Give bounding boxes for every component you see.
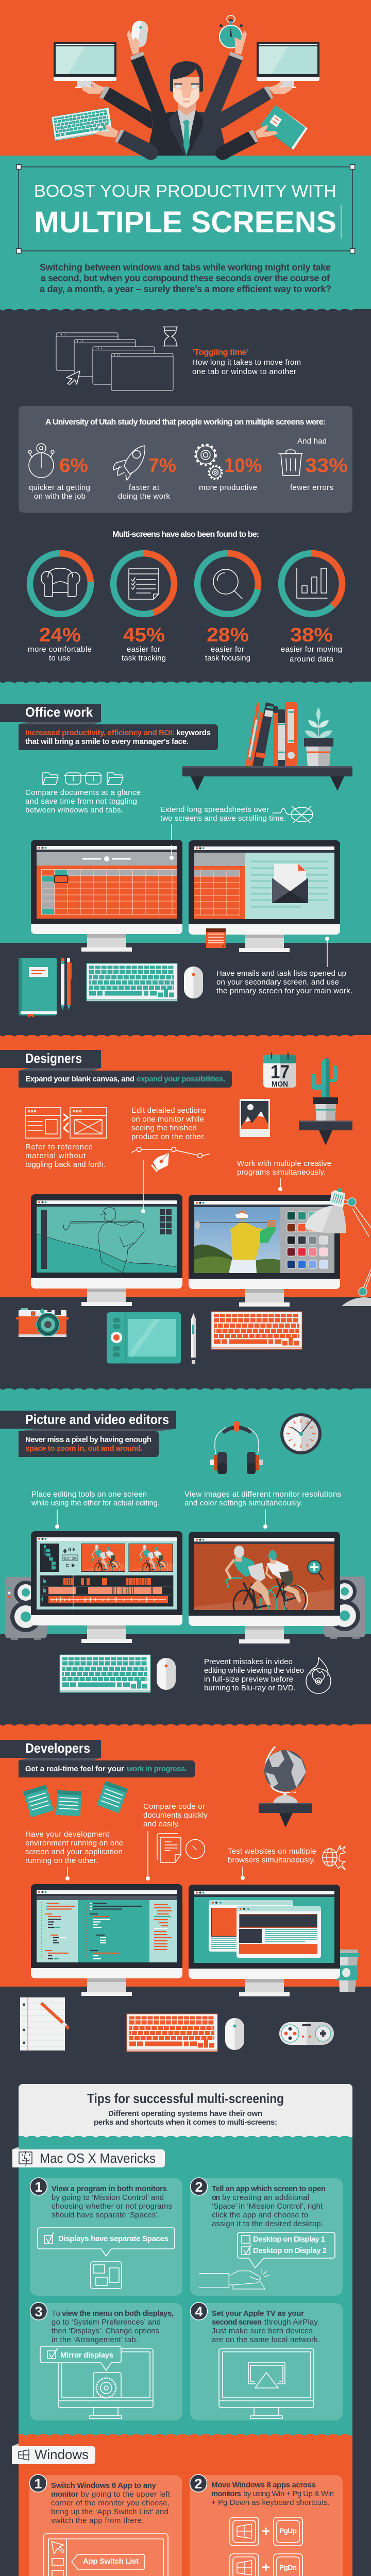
section background: designers desk: [0, 1297, 371, 1388]
text: creative programs: Work with multiple creative: [237, 1159, 331, 1168]
ring chart: 45% task tracking: [113, 553, 174, 663]
text: place editing tools: Place editing tools on one screen: [31, 1490, 147, 1499]
leader line: edit sections: [141, 1160, 145, 1213]
intro paragraph: a day, a month, a year – surely there’s a more efficient way to work?: [40, 284, 331, 294]
leader line: creative programs: [278, 1178, 282, 1191]
panel heading: developers: work in progress.: [126, 1765, 187, 1773]
card: windows tip 1: 1: [34, 2476, 42, 2492]
card: windows tip 2: + Pg Down as keyboard shortcuts.: [211, 2498, 330, 2507]
text: edit detailed sections: product on the other.: [131, 1132, 206, 1141]
graphics tablet: [107, 1312, 181, 1364]
sticky note: [206, 928, 226, 948]
card: mac tip 1: by going to ‘Mission Control’ and: [52, 2193, 164, 2202]
card: windows tip 1: Switch Windows 8 App to any: [51, 2481, 157, 2490]
video thumbnail 1: [81, 1544, 125, 1572]
monitor: source code: [31, 1884, 182, 1996]
monitor right: [257, 42, 319, 88]
section background: tips and quote dark: [0, 1987, 371, 2576]
speaker left: [5, 1577, 47, 1640]
globe on shelf: [259, 1747, 312, 1827]
card: mac tip 4: through AirPlay.: [264, 2318, 319, 2327]
panel heading: designers: Designers: [25, 1050, 82, 1066]
panel heading: picture and video editors: space to zoom in, out and around.: [25, 1444, 143, 1453]
leader line: view images: [263, 1510, 267, 1529]
icon: envelope: [272, 864, 308, 903]
stylus: [191, 1313, 196, 1364]
text: view images: View images at different monitor resolutions: [184, 1490, 341, 1499]
wall clock: [280, 1413, 322, 1454]
ring chart: 28% task focusing: 28%: [207, 624, 249, 646]
card: mac tip 2: Tell an app which screen to open: [212, 2184, 326, 2193]
ring chart: 24% comfortable: more comfortable: [28, 645, 92, 654]
card: mac tip 2: by creating an additional: [222, 2193, 309, 2202]
text: edit detailed sections: Edit detailed sections: [131, 1106, 206, 1115]
card: mac tip 4: Just make sure both devices: [212, 2327, 313, 2335]
panel heading: office work: Increased productivity, efficiency and ROI:: [25, 728, 175, 737]
text: refer to reference: toggling back and forth.: [25, 1160, 106, 1169]
multi-screens heading: Multi-screens have also been found to be:: [112, 530, 259, 539]
keys: win + PgUp: PgUp: [279, 2527, 297, 2535]
study heading: A University of Utah study found that people working on multiple screens were:: [45, 418, 326, 427]
notepad and pencil: [20, 1997, 69, 2050]
card: mac tip 4: 4: [195, 2304, 203, 2319]
card: windows tip 1: App Switch List: [83, 2557, 139, 2566]
keyboard: [60, 1655, 150, 1692]
browser window front: [237, 1906, 321, 1958]
icon: reference windows: [25, 1108, 107, 1138]
toggling time text: one tab or window to another: [192, 367, 296, 376]
title: [34, 181, 341, 239]
text: prevent mistakes: Prevent mistakes in video: [204, 1657, 293, 1666]
text: extend spreadsheets: two screens and save scrolling time.: [160, 814, 286, 823]
stat: 6% quicker: 6%: [59, 455, 88, 477]
text: compare code: documents quickly: [143, 1811, 208, 1820]
keys: win + PgDn: PgDn: [279, 2563, 297, 2571]
card: mac tip 2: on: [212, 2193, 220, 2202]
panel heading: developers: Get a real-time feel for your: [25, 1765, 124, 1773]
ring chart: 24% comfortable: to use: [49, 654, 71, 663]
stat: 7% faster: faster at: [129, 483, 160, 492]
text: place editing tools: while using the other for actual editing.: [31, 1499, 160, 1507]
ring chart: 45% task tracking: task tracking: [122, 654, 166, 663]
leader line: compare code: [146, 1831, 150, 1880]
tips heading: Tips for successful multi-screening: [87, 2091, 284, 2106]
text: compare code: [143, 1802, 208, 1828]
playback controls: [62, 1548, 78, 1567]
card: windows tip 1: monitor: [51, 2490, 78, 2499]
icon: globe with bursts: [323, 1845, 346, 1870]
calendar: 17: [271, 1061, 290, 1082]
mouse: [157, 1658, 176, 1690]
stat: 6% quicker: quicker at getting: [29, 483, 90, 492]
arm lower left: [96, 125, 159, 160]
panel heading: picture and video editors: [0, 1411, 176, 1457]
title: MULTIPLE SCREENS: [34, 206, 336, 239]
text: compare documents: [25, 788, 141, 815]
headphones: [210, 1421, 263, 1474]
text: prevent mistakes: burning to Blu-ray or DVD.: [204, 1684, 296, 1692]
sticky notes: [23, 1781, 128, 1817]
tab: Windows: [12, 2444, 95, 2464]
text: test websites: browsers simultaneously.: [228, 1856, 315, 1865]
arm middle left: [81, 81, 153, 129]
card: mac tip 4: are on the same local network.: [212, 2335, 320, 2344]
text: compare code: Compare code or: [143, 1802, 205, 1811]
ring chart: 24% comfortable: 24%: [39, 624, 81, 646]
leader line: development: [65, 1867, 70, 1880]
ring chart: 28% task focusing: [197, 553, 258, 663]
card: mac tip 2: 2: [195, 2179, 203, 2195]
books: [245, 702, 297, 766]
cactus and shelf: [299, 1058, 352, 1145]
panel: tips for successful multi-screening: [0, 2084, 371, 2576]
panel heading: picture and video editors: Picture and video editors: [25, 1412, 169, 1427]
card: mac tip 2: ‘Space’ in ‘Mission Control’, right: [212, 2202, 323, 2211]
icon: burning disc: [306, 1657, 331, 1693]
text: place editing tools: [31, 1490, 160, 1507]
text: creative programs: [237, 1159, 331, 1177]
text: view images: and color settings simultaneously.: [184, 1499, 302, 1507]
text: emails and task lists: the primary screen for your main work.: [216, 987, 352, 995]
stat: 7% faster: [113, 446, 176, 501]
text: development environment: [25, 1830, 123, 1865]
panel heading: picture and video editors: Never miss a pixel by having enough: [25, 1435, 151, 1444]
ring chart: 28% task focusing: easier for: [211, 645, 244, 654]
section background: developers orange: [0, 1724, 371, 1987]
plant: [304, 707, 333, 766]
section background: designers orange: [0, 1035, 371, 1297]
section background: editors desk: [0, 1634, 371, 1724]
card: windows tip 2: Move Windows 8 apps across: [211, 2481, 316, 2489]
notebook: [19, 958, 57, 1018]
panel heading: office work: that will bring a smile to every manager's face.: [25, 737, 189, 746]
card: mac tip 1: should have separate ‘Spaces’.: [52, 2211, 160, 2219]
stat: 7% faster: 7%: [148, 455, 176, 477]
ring chart: 38% moving data: easier for moving: [281, 645, 342, 654]
calendar: [263, 1053, 296, 1089]
ring chart: 38% moving data: [281, 553, 342, 664]
ring chart: 24% comfortable: [28, 553, 92, 663]
text: refer to reference: [25, 1143, 106, 1169]
panel heading: office work: Office work: [25, 704, 93, 720]
text: development environment: Have your development: [25, 1830, 110, 1839]
leader line: editing tools: [55, 1510, 59, 1529]
section background: dark statistics: [0, 309, 371, 682]
text: edit detailed sections: seeing the finished: [131, 1124, 197, 1132]
icon: overlapping browser windows: [56, 333, 173, 391]
keyboard held: [52, 108, 112, 141]
icon: bezier pen tool: [131, 1147, 209, 1172]
leader line: spreadsheets: [171, 824, 172, 855]
stat: 33% fewer errors: And had: [297, 437, 327, 446]
card: mac tip 4: [190, 2302, 343, 2420]
arm middle right: [219, 81, 292, 129]
mouse: [225, 2018, 244, 2050]
card: windows tip 1: by going to the upper left: [81, 2490, 171, 2499]
card: mac tip 1: 1: [35, 2179, 43, 2195]
monitor left: [54, 42, 116, 88]
monitor: email and spreadsheet: [189, 840, 340, 952]
tips heading: Different operating systems have their own: [108, 2109, 262, 2118]
torso: [146, 110, 227, 156]
card: windows tip 1: corner of the monitor you choose,: [51, 2499, 170, 2507]
section background: title teal: [0, 156, 371, 309]
stat: 6% quicker: on with the job: [34, 492, 86, 501]
text: refer to reference: Refer to reference: [25, 1143, 93, 1151]
ring chart: 45% task tracking: 45%: [123, 624, 165, 646]
card: mac tip 3: [30, 2302, 182, 2420]
arm upper right with stopwatch: [198, 15, 247, 156]
gamepad: [279, 2022, 334, 2045]
monitor: line art golfer: [31, 1160, 182, 1306]
panel heading: developers: Developers: [25, 1740, 90, 1756]
stat: 33% fewer errors: 33%: [305, 455, 348, 477]
tab: Mac OS X Mavericks: Mac OS X Mavericks: [40, 2150, 156, 2166]
video timeline: [40, 1574, 173, 1609]
panel: University of Utah study: [19, 406, 352, 513]
notebook held: [260, 105, 308, 150]
text: creative programs: programs simultaneously.: [237, 1168, 326, 1177]
monitor: spreadsheet: [31, 840, 182, 952]
monitor: browser windows: [189, 1885, 340, 1996]
card: mac tip 3: To: [52, 2309, 60, 2318]
polaroid photo: [240, 1099, 270, 1137]
card: mac tip 3: 3: [35, 2304, 43, 2319]
ring chart: 38% moving data: 38%: [290, 624, 333, 646]
card: mac tip 1: choosing whether or not programs: [52, 2202, 172, 2211]
panel heading: office work: keywords: [176, 728, 211, 737]
tips heading: perks and shortcuts when it comes to multi-screens:: [94, 2118, 277, 2127]
tips heading: [87, 2091, 284, 2127]
section background: hero orange: [0, 0, 371, 156]
arm lower right: [215, 125, 278, 160]
browser window back: [209, 1900, 293, 1952]
ring chart: 28% task focusing: task focusing: [205, 654, 250, 663]
card: windows tip 2: monitors: [211, 2489, 241, 2498]
card: mac tip 2: click the app and choose to: [212, 2211, 308, 2219]
card: mac tip 3: go to ‘System Preferences’ and: [52, 2318, 161, 2327]
card: windows tip 2: by using Win + Pg Up & Win: [243, 2489, 334, 2498]
card: windows tip 1: switch the app from there.: [51, 2516, 144, 2525]
intro paragraph: [40, 262, 331, 294]
tab: Mac OS X Mavericks: [12, 2147, 165, 2167]
panel heading: designers: expand your possibilities.: [137, 1075, 225, 1083]
ring chart: 45% task tracking: easier for: [127, 645, 160, 654]
card: mac tip 4: Set your Apple TV as your: [212, 2309, 304, 2318]
card: windows tip 2: 2: [194, 2476, 203, 2492]
card: mac tip 1: Displays have separate Spaces: [58, 2234, 168, 2243]
monitor: video editing suite: [31, 1531, 182, 1643]
icon: documents and timer: [157, 1834, 205, 1862]
arm upper left with mouse: [127, 20, 175, 156]
playback controls: 03:20: [63, 1556, 77, 1562]
stat: 33% fewer errors: fewer errors: [290, 483, 333, 492]
text: test websites: Test websites on multiple: [228, 1847, 316, 1856]
text: edit detailed sections: [131, 1106, 206, 1141]
desk lamp: [305, 1188, 371, 1306]
toggling time text: How long it takes to move from: [192, 358, 301, 367]
calendar: MON: [272, 1080, 288, 1089]
intro paragraph: Switching between windows and tabs while working might only take: [40, 262, 331, 273]
stat: 7% faster: doing the work: [118, 492, 170, 501]
card: mac tip 1: [30, 2178, 182, 2296]
title frame: [16, 165, 355, 253]
tab: Windows: Windows: [35, 2447, 89, 2462]
panel heading: designers: Expand your blank canvas, and: [25, 1075, 134, 1083]
monitor: full size video preview: [189, 1532, 340, 1643]
text: compare documents: Compare documents at a glance: [25, 788, 141, 797]
card: windows tip 2: [190, 2475, 343, 2576]
keys: win + PgUp: [230, 2517, 302, 2546]
card: windows tip 1: [29, 2475, 182, 2576]
text: view images: [184, 1490, 341, 1507]
panel heading: office work: [0, 704, 218, 750]
text: prevent mistakes: in full-size preview before: [204, 1675, 293, 1684]
card: windows tip 1: bring up the ‘App Switch List’ and: [51, 2507, 168, 2516]
text: compare documents: and save time from not toggling: [25, 797, 137, 806]
text: extend spreadsheets: Extend long spreadsheets over: [160, 805, 269, 814]
card: mac tip 2: assign it to the desired desktop.: [212, 2219, 323, 2228]
card: mac tip 3: in the ‘Arrangement’ tab.: [52, 2335, 138, 2344]
text: edit detailed sections: on one monitor while: [131, 1115, 204, 1124]
text: development environment: running on the other.: [25, 1856, 98, 1865]
camera: [16, 1308, 69, 1337]
keyboard: [87, 963, 177, 1001]
text: compare code: and easily.: [143, 1820, 180, 1828]
card: mac tip 3: then ‘Displays’. Change options: [52, 2327, 159, 2335]
text: emails and task lists: [216, 969, 352, 995]
pencils: [61, 958, 72, 1010]
file tree: [40, 1544, 59, 1572]
title: BOOST YOUR PRODUCTIVITY WITH: [34, 181, 336, 200]
keys: win + PgDn: [230, 2554, 302, 2576]
panel heading: designers: [0, 1050, 232, 1088]
head: [170, 61, 203, 115]
card: mac tip 3: Mirror displays: [60, 2351, 113, 2360]
text: development environment: environment running on one: [25, 1839, 123, 1848]
stat: 10% productive: 10%: [224, 455, 262, 477]
stat: 10% productive: [195, 445, 262, 492]
text: compare documents: between windows and tabs.: [25, 806, 123, 815]
section background: editors teal: [0, 1388, 371, 1634]
keyboard orange: [211, 1312, 302, 1349]
keyboard orange: [127, 2014, 217, 2052]
card: mac tip 3: view the menu on both displays,: [62, 2309, 174, 2318]
intro paragraph: a second, but when you compound these seconds over the course of: [41, 273, 330, 283]
card: mac tip 2: Desktop on Display 2: [253, 2246, 327, 2255]
mouse: [184, 967, 203, 998]
icon: hourglass: [163, 327, 178, 346]
toggling time text: ‘Toggling time’: [192, 347, 249, 357]
speaker right: [324, 1577, 365, 1639]
card: mac tip 2: Desktop on Display 1: [253, 2235, 325, 2244]
text: emails and task lists: on your secondary screen, and use: [216, 978, 339, 987]
shelf: [182, 766, 352, 791]
text: prevent mistakes: editing while viewing the video: [204, 1666, 304, 1675]
ring chart: 38% moving data: around data: [290, 655, 334, 664]
text: emails and task lists: Have emails and task lists opened up: [216, 969, 346, 978]
video thumbnail 2: [129, 1544, 173, 1572]
coffee cup: [336, 1950, 360, 1992]
section background: office teal: [0, 682, 371, 943]
text: development environment: screen and your application: [25, 1848, 123, 1856]
toggling time text: [192, 347, 301, 376]
icon: zoom magnifier: [308, 1561, 324, 1580]
text: refer to reference: material without: [25, 1151, 86, 1160]
shelf with books and plant: [182, 702, 352, 791]
card: mac tip 2: [190, 2178, 343, 2296]
text: extend spreadsheets: [160, 805, 286, 823]
panel heading: developers: [0, 1740, 195, 1777]
stat: 10% productive: more productive: [199, 483, 257, 492]
section background: office desk: [0, 943, 371, 1035]
text: test websites: [228, 1847, 316, 1865]
monitor: colour photo golfer and swatches: [189, 1195, 340, 1307]
hero illustration: multitasking businessman: [52, 15, 319, 160]
icons: folders and glasses: [43, 773, 123, 785]
icon: crossed out scroll mouse: [273, 806, 313, 823]
leader line: test websites: [241, 1867, 245, 1880]
text: prevent mistakes: [204, 1657, 304, 1692]
card: mac tip 1: View a program in both monitors: [52, 2184, 167, 2193]
stat: 6% quicker: [28, 444, 90, 501]
leader line: secondary screen: [325, 937, 329, 967]
stat: 33% fewer errors: [279, 437, 348, 492]
card: mac tip 4: second screen: [212, 2318, 262, 2327]
